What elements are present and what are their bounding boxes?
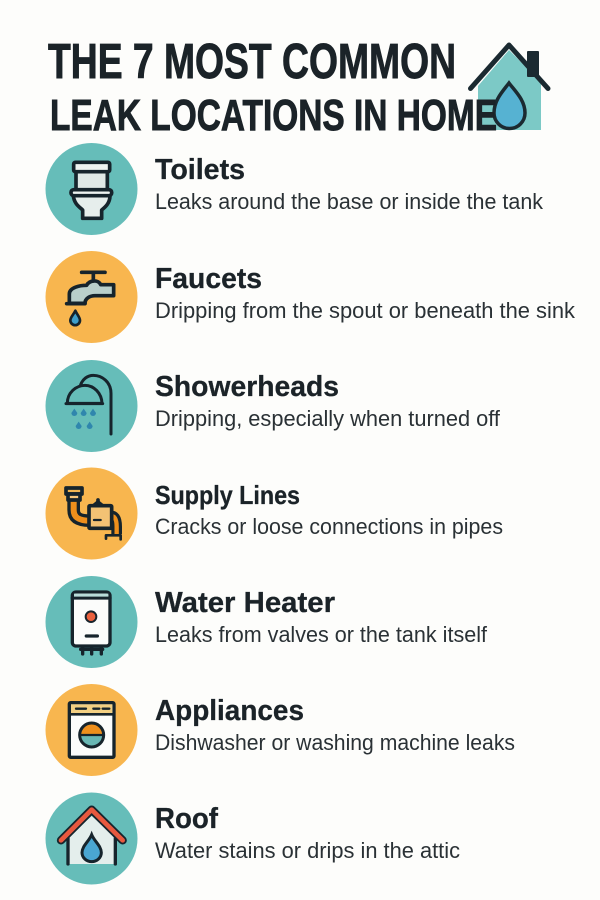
icon: pipes xyxy=(46,468,138,560)
heading: Toilets xyxy=(155,154,245,186)
item: water heater xyxy=(46,576,488,668)
item: toilets xyxy=(46,143,544,235)
icon: toilet xyxy=(46,143,138,235)
icon: washing machine xyxy=(46,684,138,776)
item: supply lines xyxy=(46,468,503,560)
description: Dishwasher or washing machine leaks xyxy=(155,730,515,755)
heading: Appliances xyxy=(155,695,304,727)
title xyxy=(48,35,497,140)
icon: water heater xyxy=(46,576,138,668)
description: Dripping, especially when turned off xyxy=(155,406,501,431)
icon: house with water drop xyxy=(470,45,548,130)
item: faucets xyxy=(46,251,576,343)
description: Dripping from the spout or beneath the sink xyxy=(155,298,576,323)
description: Cracks or loose connections in pipes xyxy=(155,514,503,539)
icon: faucet xyxy=(46,251,138,343)
icon: house roof with drop xyxy=(46,792,138,884)
heading: Water Heater xyxy=(155,587,335,619)
heading: Roof xyxy=(155,803,218,835)
item: roof xyxy=(46,792,460,884)
description: Leaks around the base or inside the tank xyxy=(155,189,544,214)
item: appliances xyxy=(46,684,515,776)
description: Water stains or drips in the attic xyxy=(155,838,460,863)
heading: Showerheads xyxy=(155,371,339,403)
title: THE 7 MOST COMMON xyxy=(48,35,456,89)
description: Leaks from valves or the tank itself xyxy=(155,622,488,647)
icon: showerhead xyxy=(46,360,138,452)
item: showerheads xyxy=(46,360,501,452)
heading: Faucets xyxy=(155,263,262,295)
heading: Supply Lines xyxy=(155,480,300,510)
